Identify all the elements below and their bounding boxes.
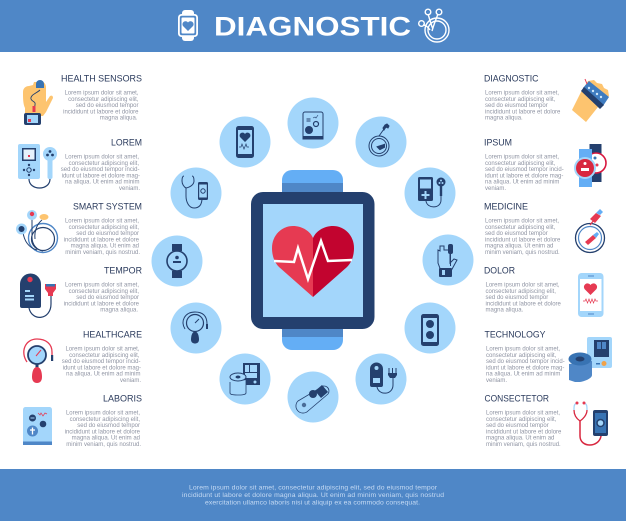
ring circle: tablet [288, 98, 338, 148]
left item: tempor: consectetur adipiscing elit, [69, 289, 139, 295]
ring circle: cuff and monitor [220, 354, 270, 404]
footer text: exercitation ullamco laboris nisi ut aliquip ex ea commodo consequat. [205, 500, 420, 506]
left item: smart system: SMART SYSTEM [73, 202, 142, 212]
left item: lorem: veniam. [119, 186, 140, 192]
right item: technology: sed do eiusmod tempor incid- [486, 359, 565, 365]
ring circle: gauge [170, 302, 222, 354]
right item: diagnostic: magna aliqua. [485, 116, 523, 122]
right item: consectetor: sed do eiusmod tempor [486, 423, 549, 429]
icon: electrodes [16, 210, 58, 252]
right item: medicine: sed do eiusmod tempor [485, 231, 548, 237]
icon: stethoscope and phone [574, 402, 608, 445]
left item: health sensors [23, 74, 142, 125]
icon: header electrodes [419, 9, 449, 42]
icon: coiled cable with plug [576, 209, 604, 252]
left item: tempor: sed do eiusmod tempor [76, 295, 139, 301]
left item: tempor: Lorem ipsum dolor sit amet, [65, 283, 139, 289]
icon: oximeter [20, 274, 56, 317]
icon: header smartwatch [178, 10, 198, 41]
right item: technology [484, 330, 612, 384]
left item: lorem: sed do eiusmod tempor incid- [61, 167, 140, 173]
right item: technology: consectetur adipiscing elit, [486, 353, 557, 359]
right item: medicine: Lorem ipsum dolor sit amet, [485, 219, 559, 225]
right item: medicine [484, 202, 604, 256]
icon: phone with heart [578, 273, 604, 317]
footer text [182, 484, 444, 506]
right item: consectetor: Lorem ipsum dolor sit amet, [486, 411, 560, 417]
right item: consectetor: consectetur adipiscing elit, [486, 417, 557, 423]
left item: laboris: magna aliqua. Ut enim ad [72, 436, 140, 442]
right item: diagnostic: DIAGNOSTIC [484, 74, 539, 84]
header band [0, 0, 626, 52]
left item: laboris: sed do eiusmod tempor [77, 423, 140, 429]
right item: technology: Lorem ipsum dolor sit amet, [486, 347, 560, 353]
right item: dolor: sed do eiusmod tempor [486, 295, 548, 301]
icon: hand with band [572, 79, 609, 122]
ring circle: stethoscope and phone [170, 168, 222, 218]
right item: technology: idunt ut labore et dolore mag- [486, 366, 564, 372]
right item: technology: na aliqua. Ut enim ad minim [486, 372, 560, 378]
left item: smart system: Lorem ipsum dolor sit amet, [65, 219, 139, 225]
left item: lorem: idunt ut labore et dolore mag- [62, 174, 140, 180]
left item: health sensors: sed do eiusmod tempor [76, 103, 138, 109]
right item: ipsum: idunt ut labore et dolore mag- [485, 174, 563, 180]
heart with pulse line [272, 226, 354, 297]
right item: technology: veniam. [486, 378, 507, 384]
ring circle: hand sensor [422, 234, 474, 286]
right item: medicine: MEDICINE [484, 202, 528, 212]
right item: consectetor: CONSECTETOR [484, 394, 549, 404]
title: DIAGNOSTIC [214, 12, 411, 42]
right item: medicine: consectetur adipiscing elit, [485, 225, 556, 231]
left item: healthcare: Lorem ipsum dolor sit amet, [65, 347, 140, 353]
right item: consectetor [484, 394, 608, 448]
right item: consectetor: magna aliqua. Ut enim ad [486, 436, 554, 442]
icon: hand with wrist sensor [23, 80, 53, 125]
left item: health sensors: HEALTH SENSORS [61, 74, 142, 84]
icon: media device with probe [18, 144, 57, 188]
right item: ipsum: IPSUM [484, 138, 512, 148]
right item: diagnostic: consectetur adipiscing elit, [485, 97, 556, 103]
left item: laboris: incididunt ut labore et dolore [65, 430, 141, 436]
left item: lorem: Lorem ipsum dolor sit amet, [65, 155, 139, 161]
left item: healthcare: idunt ut labore et dolore mag- [63, 366, 141, 372]
footer text: Lorem ipsum dolor sit amet, consectetur adipiscing elit, sed do eiusmod tempor [189, 484, 438, 492]
icon: two smartwatches [574, 144, 606, 187]
left item: laboris: LABORIS [103, 394, 142, 404]
left item: tempor: TEMPOR [104, 266, 142, 276]
left item: laboris: consectetur adipiscing elit, [70, 417, 140, 423]
right item: dolor: DOLOR [484, 266, 515, 276]
right item: ipsum [484, 138, 606, 192]
left item: lorem: consectetur adipiscing elit, [69, 161, 139, 167]
left item: smart system: magna aliqua. Ut enim ad [71, 244, 139, 250]
ring circle: media device with probe [404, 168, 456, 218]
central smartwatch [251, 170, 374, 350]
right item: medicine: minim veniam, quis nostrud. [485, 250, 560, 256]
ring circle: watch [152, 236, 202, 286]
left item: healthcare: consectetur adipiscing elit, [69, 353, 140, 359]
right item: ipsum: Lorem ipsum dolor sit amet, [485, 155, 559, 161]
left item: smart system: consectetur adipiscing elit, [69, 225, 139, 231]
right item: ipsum: sed do eiusmod tempor incid- [485, 167, 564, 173]
left item: lorem: LOREM [111, 138, 142, 148]
right item: medicine: incididunt ut labore et dolore [485, 238, 561, 244]
right item: medicine: magna aliqua. Ut enim ad [485, 244, 553, 250]
icon: blood pressure gauge [24, 339, 53, 383]
right item: ipsum: consectetur adipiscing elit, [485, 161, 556, 167]
left item: lorem [18, 138, 142, 192]
right item: consectetor: minim veniam, quis nostrud. [486, 442, 561, 448]
left item: tempor [20, 266, 142, 317]
right item: dolor: consectetur adipiscing elit, [486, 289, 556, 295]
right item: diagnostic [484, 74, 609, 122]
left item: tempor: incididunt ut labore et dolore [64, 302, 140, 308]
right item: ipsum: na aliqua. Ut enim ad minim [485, 180, 559, 186]
footer text: incididunt ut labore et dolore magna aliqua. Ut enim ad minim veniam, quis nostrud [182, 492, 444, 499]
left item: health sensors: magna aliqua. [100, 116, 138, 122]
right item: dolor: Lorem ipsum dolor sit amet, [486, 283, 560, 289]
icon: tablet [23, 407, 52, 445]
left item: tempor: magna aliqua. [100, 308, 138, 314]
left item: smart system: minim veniam, quis nostrud. [65, 250, 140, 256]
right item: dolor: incididunt ut labore et dolore [486, 302, 562, 308]
right item: diagnostic: incididunt ut labore et dolore [485, 110, 561, 116]
left item: laboris [23, 394, 142, 448]
right item: consectetor: incididunt ut labore et dolore [486, 430, 562, 436]
right item: ipsum: veniam. [485, 186, 506, 192]
left item: laboris: minim veniam, quis nostrud. [66, 442, 141, 448]
left item: healthcare: sed do eiusmod tempor incid- [62, 359, 140, 365]
left item: smart system [16, 202, 142, 256]
right item: dolor [484, 266, 604, 317]
ring circle: oximeter [356, 354, 406, 404]
left item: health sensors: consectetur adipiscing elit, [68, 97, 139, 103]
ring circle: phone with heart [220, 116, 270, 168]
right item: dolor: magna aliqua. [486, 308, 524, 314]
ring circle: probe [288, 372, 338, 422]
icon: cuff and monitor [568, 337, 612, 382]
left item: healthcare: na aliqua. Ut enim ad minim [66, 372, 140, 378]
left item: lorem: na aliqua. Ut enim ad minim [65, 180, 140, 186]
left item: smart system: sed do eiusmod tempor [76, 231, 139, 237]
ring circle: phone with gauges [404, 302, 456, 354]
ring circle: coiled cable [356, 116, 406, 168]
left item: smart system: incididunt ut labore et dolore [64, 238, 140, 244]
right item: technology: TECHNOLOGY [484, 330, 546, 340]
right item: diagnostic: sed do eiusmod tempor [485, 103, 548, 109]
footer band [0, 469, 626, 521]
left item: laboris: Lorem ipsum dolor sit amet, [66, 411, 140, 417]
left item: healthcare [24, 330, 142, 384]
right item: diagnostic: Lorem ipsum dolor sit amet, [485, 91, 559, 97]
left item: health sensors: Lorem ipsum dolor sit amet, [64, 91, 139, 97]
left item: healthcare: HEALTHCARE [83, 330, 142, 340]
left item: healthcare: veniam. [120, 378, 141, 384]
left item: health sensors: incididunt ut labore et dolore [63, 110, 139, 116]
